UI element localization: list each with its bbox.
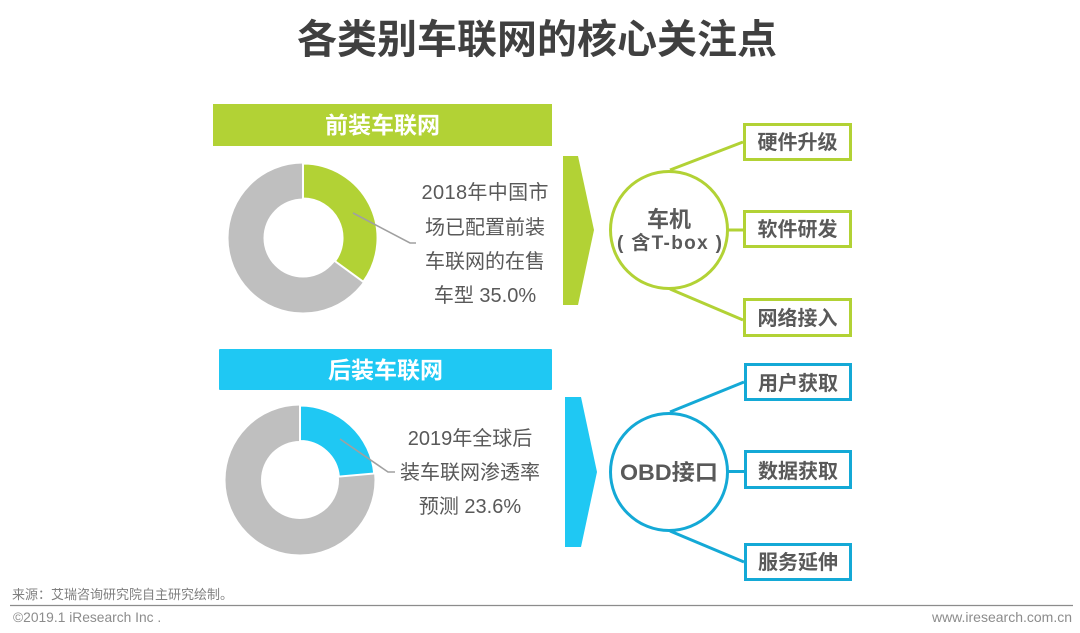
box: network access: 网络接入 — [758, 306, 838, 330]
box: hardware upgrade: 硬件升级 — [758, 131, 838, 154]
text block: 2018 share: 2018年中国市 — [422, 181, 548, 204]
box: data acquisition: 数据获取 — [758, 460, 838, 483]
text block: 2018 share: 车型 35.0% — [434, 284, 536, 307]
box: service extension — [746, 544, 850, 580]
copyright: ©2019.1 iResearch Inc . — [13, 610, 161, 625]
circle: OBD port — [610, 414, 728, 530]
circle: head unit: 车机 — [647, 207, 691, 232]
box: user acquisition: 用户获取 — [758, 371, 838, 395]
circle: head unit — [610, 172, 728, 288]
title: 各类别车联网的核心关注点 — [297, 18, 777, 62]
text block: 2018 share: 车联网的在售 — [425, 250, 545, 273]
box: software development: 软件研发 — [758, 218, 838, 241]
box: user acquisition — [746, 364, 850, 400]
leader line: front-installed — [353, 213, 416, 243]
connector lines: OBD — [670, 382, 744, 562]
panel: front-installed telematics — [213, 104, 850, 336]
source note: 来源：艾瑞咨询研究院自主研究绘制。 — [12, 584, 233, 603]
arrow: front-installed — [563, 156, 594, 305]
text block: 2019 forecast: 预测 23.6% — [419, 495, 521, 518]
text block: 2019 forecast: 2019年全球后 — [408, 427, 532, 450]
heading bar: front-installed — [213, 104, 552, 146]
text block: 2019 forecast — [400, 427, 540, 518]
connector lines: head unit — [670, 142, 743, 320]
leader line: aftermarket — [340, 439, 395, 472]
circle: head unit: ( 含T-box ) — [617, 231, 722, 254]
heading bar: aftermarket — [219, 349, 552, 390]
heading bar: aftermarket: 后装车联网 — [328, 357, 443, 383]
box: data acquisition — [746, 452, 850, 488]
panel: aftermarket telematics — [219, 349, 850, 580]
website: www.iresearch.com.cn — [931, 609, 1072, 625]
text block: 2018 share — [422, 181, 548, 307]
box: hardware upgrade — [744, 124, 850, 160]
text block: 2018 share: 场已配置前装 — [425, 216, 545, 239]
donut chart: 35.0% — [228, 164, 378, 312]
text block: 2019 forecast: 装车联网渗透率 — [400, 461, 540, 484]
box: service extension: 服务延伸 — [758, 551, 838, 574]
donut chart: 23.6% — [225, 406, 374, 554]
heading bar: front-installed: 前装车联网 — [325, 112, 440, 138]
box: network access — [744, 300, 850, 336]
box: software development — [744, 212, 850, 246]
arrow: aftermarket — [565, 397, 597, 547]
circle: OBD port: OBD接口 — [620, 460, 718, 485]
